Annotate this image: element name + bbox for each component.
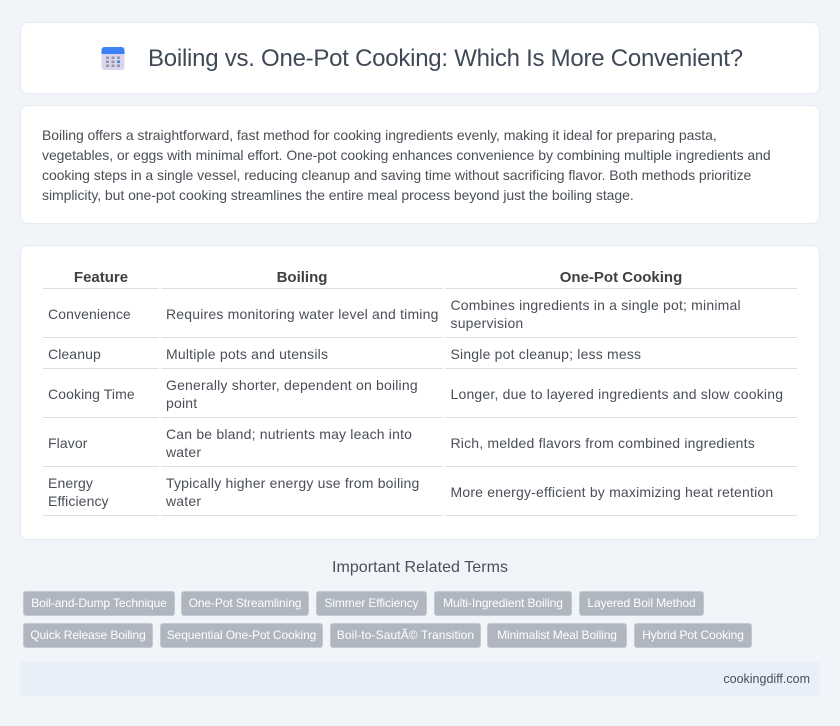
header panel bbox=[20, 22, 820, 94]
intro paragraph: Boiling offers a straightforward, fast method for cooking ingredients evenly, making it ideal for preparing pasta, bbox=[42, 127, 717, 143]
related term tags: Boil-and-Dump Technique bbox=[31, 596, 167, 610]
related term tags: Sequential One-Pot Cooking bbox=[167, 628, 316, 642]
icon: calendar bbox=[102, 47, 124, 70]
footer bar bbox=[20, 662, 820, 696]
related term tags: Hybrid Pot Cooking bbox=[642, 628, 744, 642]
comparison table bbox=[43, 269, 797, 516]
title: Boiling vs. One-Pot Cooking: Which Is More Convenient? bbox=[148, 45, 743, 72]
comparison table: Longer, due to layered ingredients and slow cooking bbox=[450, 386, 783, 402]
comparison table: Energy bbox=[48, 475, 93, 491]
intro paragraph: cooking steps in a single vessel, reducing cleanup and saving time without sacrificing flavor. Both methods prioritize bbox=[42, 167, 751, 183]
comparison table: Can be bland; nutrients may leach into bbox=[166, 426, 412, 442]
related terms heading: Important Related Terms bbox=[332, 559, 508, 576]
intro paragraph: simplicity, but one-pot cooking streamlines the entire meal process beyond just the boiling stage. bbox=[42, 187, 634, 203]
comparison table: Convenience bbox=[48, 306, 131, 322]
related term tags: One-Pot Streamlining bbox=[189, 596, 301, 610]
related term tags bbox=[23, 591, 752, 648]
comparison table: supervision bbox=[450, 315, 523, 331]
related term tags: Simmer Efficiency bbox=[324, 596, 419, 610]
intro paragraph bbox=[42, 127, 771, 203]
comparison table: Combines ingredients in a single pot; minimal bbox=[450, 297, 741, 313]
comparison table: water bbox=[166, 444, 201, 460]
comparison table: More energy-efficient by maximizing heat retention bbox=[450, 484, 773, 500]
intro paragraph: vegetables, or eggs with minimal effort. One-pot cooking enhances convenience by combining multiple ingredients and bbox=[42, 147, 771, 163]
comparison table: One-Pot Cooking bbox=[560, 269, 682, 286]
comparison table: Generally shorter, dependent on boiling bbox=[166, 377, 418, 393]
comparison table: Typically higher energy use from boiling bbox=[166, 475, 420, 491]
comparison table: Cooking Time bbox=[48, 386, 135, 402]
comparison table: Rich, melded flavors from combined ingredients bbox=[450, 435, 755, 451]
comparison table: Flavor bbox=[48, 435, 88, 451]
comparison table: Multiple pots and utensils bbox=[166, 346, 328, 362]
related term tags: Quick Release Boiling bbox=[30, 628, 146, 642]
related term tags: Boil-to-SautÃ© Transition bbox=[337, 628, 474, 642]
comparison table: Cleanup bbox=[48, 346, 101, 362]
comparison table: point bbox=[166, 395, 197, 411]
comparison table panel bbox=[20, 245, 820, 540]
footer site name: cookingdiff.com bbox=[723, 672, 810, 686]
comparison table: Boiling bbox=[277, 269, 327, 286]
intro text panel bbox=[20, 105, 820, 224]
comparison table: Single pot cleanup; less mess bbox=[450, 346, 641, 362]
related term tags: Multi-Ingredient Boiling bbox=[443, 596, 563, 610]
comparison table: Efficiency bbox=[48, 493, 109, 509]
comparison table: Requires monitoring water level and timing bbox=[166, 306, 439, 322]
related term tags: Layered Boil Method bbox=[587, 596, 696, 610]
comparison table: water bbox=[166, 493, 201, 509]
comparison table: Feature bbox=[74, 269, 128, 286]
related term tags: Minimalist Meal Boiling bbox=[497, 628, 617, 642]
